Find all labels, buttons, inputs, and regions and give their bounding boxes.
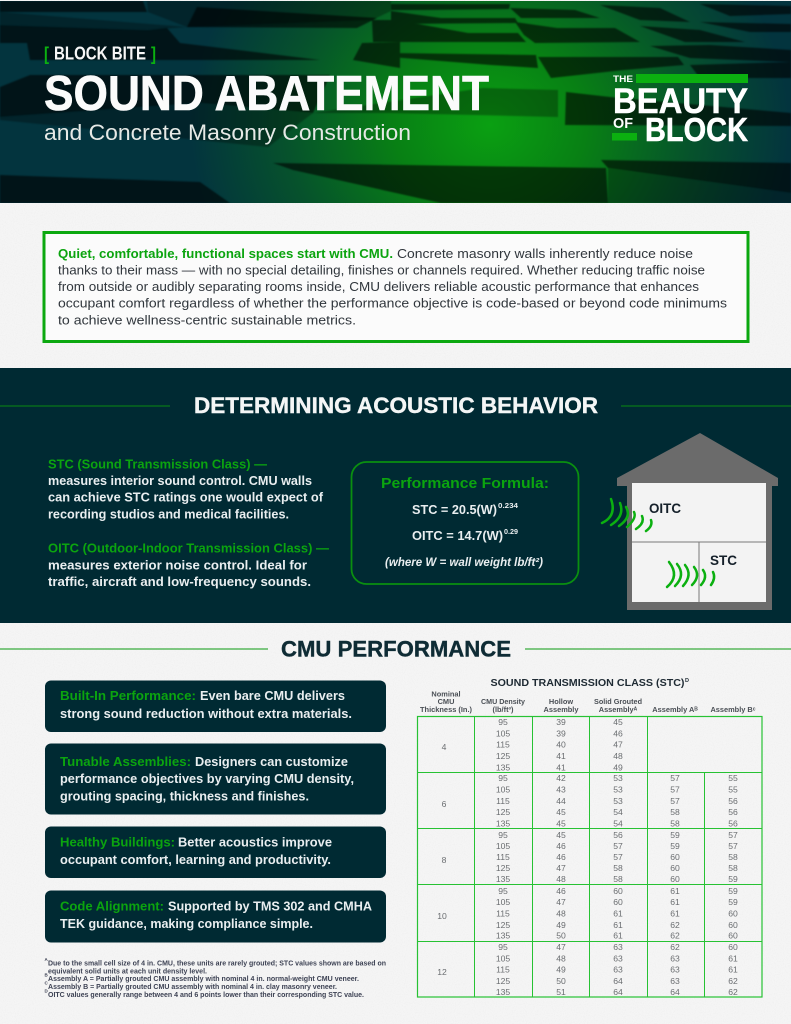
table row group: 8 in: 58 <box>728 852 738 862</box>
title: SOUND ABATEMENT <box>44 67 489 121</box>
table column headers: Nominal <box>431 690 461 698</box>
table row group: 6 in: 45 <box>556 818 566 828</box>
footnotes: Due to the small cell size of 4 in. CMU, these units are rarely grouted; STC values shown are based on <box>48 958 386 968</box>
card: tunable assemblies: Tunable Assemblies: <box>60 754 191 769</box>
table column headers: Assembly Bᶜ <box>710 705 756 714</box>
icon: indoor sound waves <box>667 562 714 587</box>
table row group: 6 in: 125 <box>496 807 510 817</box>
table row group: 10 in: 60 <box>728 920 738 930</box>
table row group: 4 in: 135 <box>496 762 510 772</box>
table row group: 6 in: 57 <box>670 784 680 794</box>
table row group: 12 in: 12 <box>437 967 447 977</box>
table row group: 12 in: 63 <box>613 954 623 964</box>
table row group: 8 in: 57 <box>613 841 623 851</box>
footnotes: D <box>44 988 48 994</box>
footnotes: B <box>44 972 48 978</box>
table row group: 10 in: 46 <box>556 886 566 896</box>
table row group: 6 in: 56 <box>728 818 738 828</box>
table row group: 6 in: 53 <box>613 796 623 806</box>
table row group: 6 in: 54 <box>613 818 623 828</box>
icon: outdoor sound waves <box>602 499 651 531</box>
table row group: 12 in: 61 <box>728 964 738 974</box>
table column headers: Solid Grouted <box>594 697 642 706</box>
table row group: 12 in: 63 <box>670 976 680 986</box>
table row group: 8 in: 59 <box>670 841 680 851</box>
table row group: 6 in: 135 <box>496 818 510 828</box>
table row group: 4 in: 47 <box>613 740 623 750</box>
table row group: 6 in: 42 <box>556 773 566 783</box>
header photo: concrete block wall <box>0 1 791 203</box>
card: tunable assemblies: grouting spacing, thickness and finishes. <box>60 788 309 804</box>
table row group: 6 in: 53 <box>613 773 623 783</box>
table row group: 12 in: 95 <box>498 942 508 952</box>
table row group: 8 in: 58 <box>613 874 623 884</box>
table column headers: CMU <box>438 697 454 706</box>
panel: performance formula: (where W = wall weight lb/ft²) <box>385 557 543 569</box>
card: tunable assemblies: performance objectives by varying CMU density, <box>60 771 354 786</box>
table row group: 12 in: 60 <box>728 942 738 952</box>
label: block bite: [ <box>44 44 49 64</box>
table row group: 12 in: 62 <box>728 976 738 986</box>
panel: performance formula: OITC = 14.7(W) <box>412 529 503 543</box>
table row group: 6 in: 58 <box>670 818 680 828</box>
table column headers: CMU Density <box>481 697 526 706</box>
table row group: 10 in: 62 <box>670 930 680 940</box>
table row group: 8 in: 46 <box>556 841 566 851</box>
table row group: 12 in: 49 <box>556 964 566 974</box>
footnotes: equivalent solid units at each unit density level. <box>48 966 207 976</box>
card: healthy buildings: Healthy Buildings: <box>60 834 175 850</box>
table row group: 8 in: 60 <box>670 852 680 862</box>
table row group: 8 in: 60 <box>670 863 680 873</box>
card: built-in performance <box>45 680 386 732</box>
text block: STC definition <box>48 456 324 522</box>
subtitle: and Concrete Masonry Construction <box>44 120 411 145</box>
panel: intro callout <box>44 232 748 342</box>
table row group: 4 in: 39 <box>556 717 566 727</box>
table row group: 4 in: 41 <box>556 751 566 761</box>
label: OITC: OITC <box>649 501 681 516</box>
table row group: 10 in: 50 <box>556 930 566 940</box>
card: built-in performance: Even bare CMU delivers <box>200 688 345 703</box>
table row group: 8 in: 56 <box>613 830 623 840</box>
table row group: 12 in: 63 <box>613 942 623 952</box>
table title: SOUND TRANSMISSION CLASS (STC) <box>490 677 684 689</box>
text block: STC definition: recording studios and medical facilities. <box>48 506 289 522</box>
table row group: 12 in: 125 <box>496 976 510 986</box>
table row group: 12 in <box>437 942 738 997</box>
footnotes: Assembly A = Partially grouted CMU assembly with nominal 4 in. normal-weight CMU veneer. <box>48 974 359 983</box>
table row group: 10 in: 60 <box>613 897 623 907</box>
table row group: 6 in: 45 <box>556 807 566 817</box>
table row group: 8 in: 8 <box>442 855 447 865</box>
text block: OITC definition: OITC (Outdoor-Indoor Transmission Class) — <box>48 540 329 556</box>
table row group: 10 in: 49 <box>556 920 566 930</box>
table row group: 12 in: 63 <box>670 964 680 974</box>
table row group: 6 in: 56 <box>728 796 738 806</box>
table row group: 8 in: 57 <box>728 830 738 840</box>
label: STC: STC <box>710 553 737 568</box>
table row group: 8 in: 95 <box>498 830 508 840</box>
table row group: 4 in: 4 <box>442 742 447 752</box>
table row group: 6 in: 43 <box>556 784 566 794</box>
table column headers <box>420 690 756 714</box>
table row group: 8 in: 45 <box>556 830 566 840</box>
table row group: 12 in: 64 <box>613 976 623 986</box>
table row group: 12 in: 63 <box>613 964 623 974</box>
logo: the beauty of block: THE <box>613 74 633 85</box>
table row group: 4 in: 115 <box>496 740 510 750</box>
text block: OITC definition: traffic, aircraft and low-frequency sounds. <box>48 574 311 589</box>
table row group: 8 in: 57 <box>613 852 623 862</box>
table row group: 4 in: 95 <box>498 717 508 727</box>
footnotes <box>44 957 386 999</box>
table row group: 10 in: 59 <box>728 886 738 896</box>
table row group: 6 in: 55 <box>728 773 738 783</box>
table column headers: Assemblyᴬ <box>599 705 638 714</box>
panel: intro callout: Quiet, comfortable, functional spaces start with CMU. <box>58 246 393 261</box>
table row group: 4 in: 125 <box>496 751 510 761</box>
card: built-in performance: Built-In Performance: <box>60 688 196 703</box>
table row group: 6 in: 55 <box>728 784 738 794</box>
panel: intro callout: from outside or audibly separating rooms inside, CMU delivers reliable acoustic performance that enhances <box>58 279 700 294</box>
card: built-in performance: strong sound reduction without extra materials. <box>60 706 352 721</box>
table row group: 10 in: 61 <box>613 920 623 930</box>
table row group: 12 in: 48 <box>556 954 566 964</box>
table row group: 8 in: 59 <box>670 830 680 840</box>
table row group: 12 in: 64 <box>670 987 680 997</box>
table row group: 12 in: 62 <box>728 987 738 997</box>
label: block bite: ] <box>151 44 156 64</box>
heading: determining acoustic behavior: DETERMINING ACOUSTIC BEHAVIOR <box>194 393 598 418</box>
table column headers: Assembly Aᴮ <box>652 705 698 714</box>
logo: the beauty of block: BEAUTY <box>613 82 748 121</box>
table row group: 8 in: 58 <box>613 863 623 873</box>
table row group: 8 in: 58 <box>728 863 738 873</box>
text block: STC definition: STC (Sound Transmission Class) — <box>48 456 267 472</box>
table row group: 4 in: 105 <box>496 728 510 738</box>
table column headers: Assembly <box>544 705 579 714</box>
table row group: 10 in: 61 <box>670 886 680 896</box>
panel: performance formula <box>352 462 578 584</box>
table row group: 8 in: 59 <box>728 874 738 884</box>
table row group: 10 in: 47 <box>556 897 566 907</box>
table row group: 12 in: 63 <box>670 954 680 964</box>
table row group: 8 in: 115 <box>496 852 510 862</box>
table row group: 6 in: 58 <box>670 807 680 817</box>
diagram: house with sound waves <box>602 433 778 610</box>
table row group: 4 in: 49 <box>613 762 623 772</box>
panel: intro callout: to achieve wellness-centric sustainable metrics. <box>58 312 356 328</box>
card: code alignment: Code Alignment: <box>60 898 164 914</box>
table row group: 4 in: 39 <box>556 728 566 738</box>
panel: determining acoustic behavior <box>0 368 791 623</box>
table row group: 8 in <box>442 830 738 884</box>
footnotes: OITC values generally range between 4 and 6 points lower than their corresponding STC value. <box>48 990 364 999</box>
table row group: 12 in: 62 <box>670 942 680 952</box>
table column headers: Hollow <box>549 697 573 706</box>
table row group: 8 in: 47 <box>556 863 566 873</box>
table row group: 10 in: 135 <box>496 930 510 940</box>
text block: OITC definition <box>48 540 329 589</box>
panel: intro callout: Concrete masonry walls inherently reduce noise <box>397 246 693 261</box>
table row group: 12 in: 47 <box>556 942 566 952</box>
panel: performance formula: Performance Formula: <box>381 475 549 492</box>
card: code alignment: TEK guidance, making compliance simple. <box>60 916 313 931</box>
table row group: 10 in: 125 <box>496 920 510 930</box>
table: STC values <box>418 690 762 997</box>
table row group: 10 in: 62 <box>670 920 680 930</box>
table row group: 10 in: 10 <box>437 911 447 921</box>
table row group: 4 in: 46 <box>613 728 623 738</box>
header banner <box>0 1 791 203</box>
card: code alignment: Supported by TMS 302 and CMHA <box>168 898 373 914</box>
panel: performance formula: 0.29 <box>504 529 518 536</box>
table row group: 4 in: 45 <box>613 717 623 727</box>
table row group: 12 in: 50 <box>556 976 566 986</box>
table row group: 10 in: 115 <box>496 908 510 918</box>
text block: STC definition: can achieve STC ratings one would expect of <box>48 490 324 504</box>
table row group: 10 in: 60 <box>728 930 738 940</box>
table title: D <box>685 678 689 684</box>
table row group: 6 in: 56 <box>728 807 738 817</box>
table row group: 8 in: 48 <box>556 874 566 884</box>
table column headers: Thickness (In.) <box>420 705 473 714</box>
table row group: 10 in: 61 <box>670 908 680 918</box>
card: tunable assemblies: Designers can customize <box>195 754 348 769</box>
table row group: 4 in: 48 <box>613 751 623 761</box>
table row group: 4 in: 41 <box>556 762 566 772</box>
panel: intro callout: thanks to their mass — with no special detailing, finishes or channels required. Whether reducing traffic noise <box>58 262 705 278</box>
table row group: 10 in: 59 <box>728 897 738 907</box>
table row group: 12 in: 135 <box>496 987 510 997</box>
table row group: 6 in: 6 <box>442 799 447 809</box>
text block: STC definition: measures interior sound control. CMU walls <box>48 473 312 488</box>
table row group: 12 in: 61 <box>728 954 738 964</box>
table row group: 6 in: 57 <box>670 796 680 806</box>
table row group: 10 in: 60 <box>728 908 738 918</box>
table row group: 12 in: 115 <box>496 964 510 974</box>
footnotes: A <box>44 957 48 962</box>
footnotes: C <box>44 980 48 986</box>
heading: CMU performance: CMU PERFORMANCE <box>281 636 511 662</box>
panel: performance formula: STC = 20.5(W) <box>412 503 497 517</box>
table row group: 8 in: 105 <box>496 841 510 851</box>
text block: OITC definition: measures exterior noise control. Ideal for <box>48 558 307 572</box>
table row group: 12 in: 51 <box>556 987 566 997</box>
logo: the beauty of block <box>612 74 748 148</box>
card: healthy buildings: occupant comfort, learning and productivity. <box>60 852 331 867</box>
table row group: 6 in: 53 <box>613 784 623 794</box>
table row group: 10 in <box>437 886 738 940</box>
table row group: 4 in <box>442 717 623 772</box>
panel: performance formula: 0.234 <box>498 503 518 510</box>
footnotes: Assembly B = Partially grouted CMU assembly with nominal 4 in. clay masonry veneer. <box>48 982 337 991</box>
table row group: 6 in: 54 <box>613 807 623 817</box>
table row group: 10 in: 61 <box>670 897 680 907</box>
table row group: 10 in: 60 <box>613 886 623 896</box>
panel: intro callout: occupant comfort regardless of whether the performance objective is code-based or beyond code minimums <box>58 296 728 310</box>
table column headers: (lb/ft³) <box>493 705 514 714</box>
table row group: 6 in: 95 <box>498 773 508 783</box>
table grid <box>418 716 762 997</box>
table row group: 6 in: 44 <box>556 796 566 806</box>
table row group: 8 in: 135 <box>496 874 510 884</box>
table row group: 10 in: 61 <box>613 908 623 918</box>
logo: the beauty of block: BLOCK <box>645 111 748 148</box>
table row group: 6 in: 57 <box>670 773 680 783</box>
table row group: 6 in <box>442 773 738 828</box>
table row group: 10 in: 48 <box>556 908 566 918</box>
label: block bite: BLOCK BITE <box>54 42 146 64</box>
table row group: 6 in: 115 <box>496 796 510 806</box>
table row group: 10 in: 95 <box>498 886 508 896</box>
table row group: 12 in: 105 <box>496 954 510 964</box>
card: healthy buildings: Better acoustics improve <box>178 834 332 850</box>
table row group: 8 in: 46 <box>556 852 566 862</box>
card: healthy buildings <box>45 826 386 878</box>
table row group: 8 in: 57 <box>728 841 738 851</box>
logo: the beauty of block: OF <box>613 116 633 132</box>
table row group: 12 in: 64 <box>613 987 623 997</box>
table row group: 6 in: 105 <box>496 784 510 794</box>
card: code alignment <box>45 890 386 942</box>
table row group: 4 in: 40 <box>556 740 566 750</box>
table row group: 8 in: 125 <box>496 863 510 873</box>
table row group: 10 in: 105 <box>496 897 510 907</box>
table row group: 8 in: 60 <box>670 874 680 884</box>
table row group: 10 in: 61 <box>613 930 623 940</box>
card: tunable assemblies <box>45 744 386 814</box>
